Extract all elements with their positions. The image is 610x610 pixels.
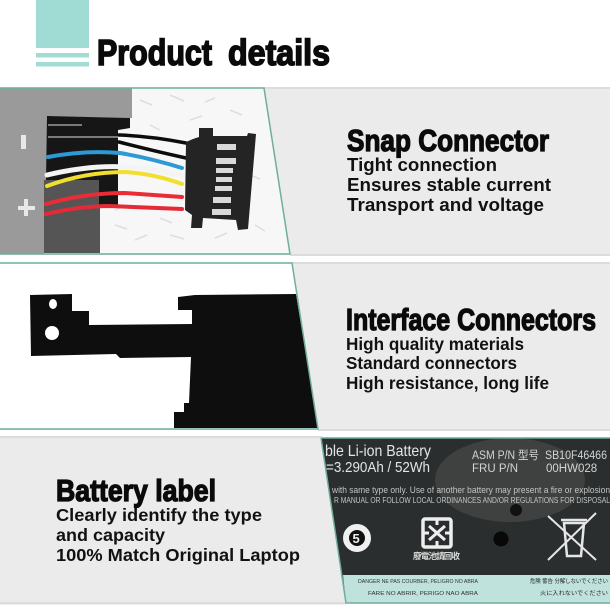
photo: battery label: ble Li-ion Battery [325, 443, 431, 460]
warning text strip [358, 577, 609, 597]
text block: snap connector details: Transport and voltage [347, 195, 544, 215]
icon: 5 year recycling circle: 5 [352, 531, 360, 546]
photo: battery label: 00HW028 [546, 463, 597, 475]
text block: interface details: High resistance, long life [346, 373, 549, 393]
text block: snap connector details: Tight connection [347, 155, 497, 175]
photo: battery label [321, 438, 610, 603]
text block: interface details: Standard connectors [346, 353, 517, 373]
text block: interface details: High quality materials [346, 334, 524, 354]
text block: battery label details: Clearly identify the type [56, 505, 262, 525]
photo: battery label: =3.290Ah / 52Wh [326, 460, 430, 476]
icon: teal title block [36, 0, 89, 66]
icon: crossed out bin [548, 513, 596, 560]
title: Product [97, 32, 212, 73]
photo: battery label: FRU P/N [472, 463, 518, 475]
panel: interface connectors [0, 262, 610, 431]
heading: battery label: Battery label [56, 473, 216, 508]
wires [46, 135, 186, 214]
icon: 5 year recycling circle [346, 527, 368, 549]
text block: snap connector details [347, 155, 551, 215]
title: details [228, 32, 330, 73]
warning text strip: 火に入れないでください [540, 590, 609, 597]
text block: snap connector details: Ensures stable current [347, 175, 551, 195]
text block: battery label details [56, 505, 300, 565]
title [97, 32, 330, 73]
icon: battery recycling mark: 廢電池請回收 [413, 551, 460, 561]
photo: wires and connector [0, 88, 290, 254]
icon: minus and plus marks [18, 135, 35, 216]
photo: battery label: ASM P/N 型号 [472, 448, 539, 462]
photo: black flat connector [30, 294, 318, 428]
icon: battery recycling mark [413, 519, 460, 561]
panel: snap connector [0, 87, 610, 256]
connector [185, 128, 256, 230]
warning text strip: FARE NO ABRIR, PERIGO NAO ABRA [368, 591, 478, 597]
heading: snap connector: Snap Connector [347, 123, 549, 158]
warning text strip: 危険 警告 分解しないでください [530, 577, 608, 585]
teal border [0, 88, 290, 254]
warning text strip: DANGER NE PAS COURBER, PELIGRO NO ABRA [358, 579, 478, 585]
teal border [0, 263, 318, 429]
text block: battery label details: and capacity [56, 525, 165, 545]
text block: battery label details: 100% Match Original Laptop [56, 545, 300, 565]
panel: battery label [0, 436, 610, 604]
text block: interface details [346, 334, 549, 393]
